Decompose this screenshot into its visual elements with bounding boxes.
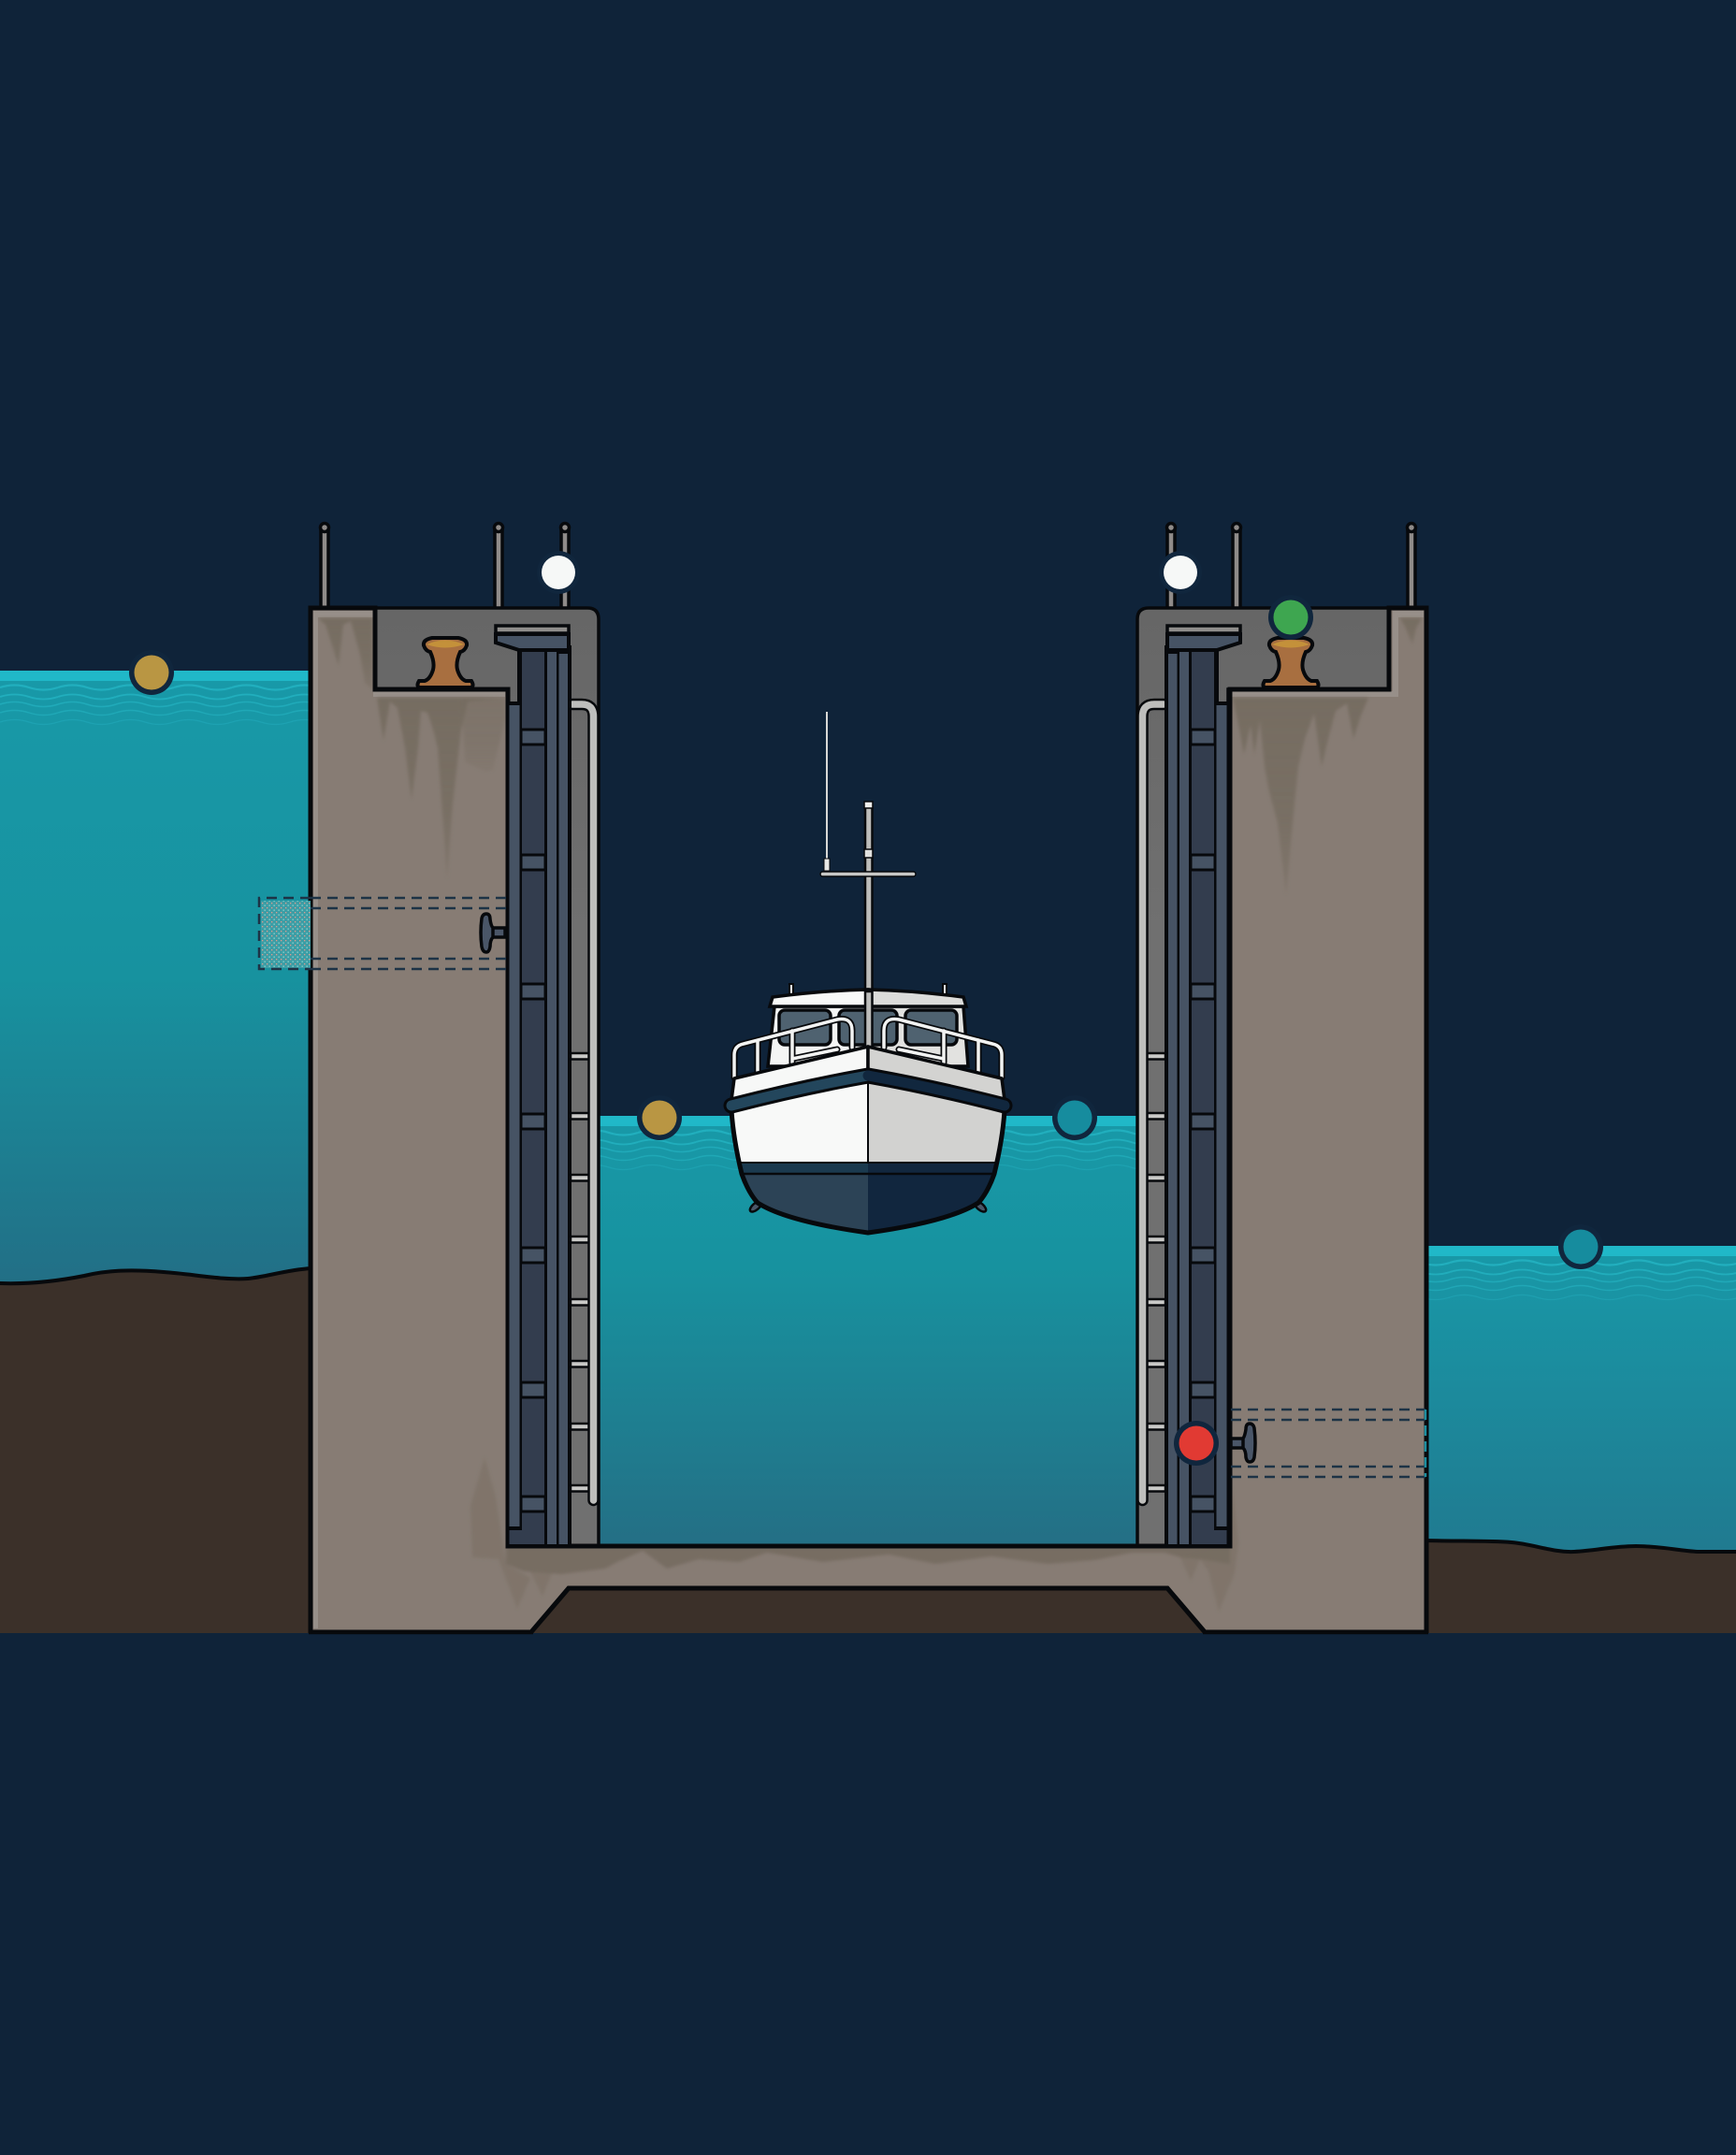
wall highlights — [313, 611, 1424, 1628]
mast and crossbar — [820, 802, 916, 1046]
stains: chamber floor — [470, 1457, 1238, 1612]
back panel: left — [375, 608, 599, 1546]
indicator: white, right gate — [1159, 551, 1202, 594]
indicator: green, right bollard — [1268, 595, 1313, 640]
lock gate: left — [496, 626, 571, 1548]
bollard: right — [1263, 638, 1319, 687]
water: lock chamber — [595, 1116, 1141, 1546]
indicator: white, left gate — [537, 551, 580, 594]
culvert: right wall — [1231, 1410, 1425, 1477]
structure outline — [311, 608, 1426, 1632]
handrail pipe: right — [1143, 704, 1164, 1500]
indicator: teal, downstream water — [1558, 1224, 1603, 1269]
indicator: red, right valve — [1174, 1421, 1219, 1466]
bottom edge of walls — [309, 1630, 1428, 1634]
water: upstream left — [0, 671, 311, 1288]
foredeck — [731, 1047, 1005, 1100]
handrail pipe: left — [572, 704, 593, 1500]
boat — [731, 712, 1005, 1233]
ground: right bank — [1426, 1540, 1736, 1646]
valve: right — [1231, 1424, 1255, 1462]
bilge fins — [748, 1199, 988, 1214]
indicator: teal, chamber — [1052, 1095, 1097, 1140]
stains: left wall — [318, 618, 505, 879]
radio antenna — [824, 712, 830, 871]
valve: left — [481, 914, 505, 952]
culvert: left wall with intake — [259, 898, 506, 969]
cabin — [768, 984, 968, 1066]
bow railing — [734, 1020, 1002, 1078]
ladder: left — [571, 1053, 591, 1491]
rub rail — [731, 1076, 1005, 1106]
ladder: right — [1145, 1053, 1165, 1491]
back panel: right — [1137, 608, 1389, 1546]
railing posts: right wall — [1167, 524, 1416, 627]
indicator: gold, upstream water — [129, 650, 174, 695]
concrete lock structure — [311, 608, 1426, 1632]
ground under chamber floor — [519, 1588, 1217, 1646]
stains: right wall — [1233, 618, 1422, 895]
lock gate: right — [1165, 626, 1240, 1548]
navy below ground line — [0, 1633, 1736, 2155]
water: downstream right — [1426, 1246, 1736, 1555]
bollard: left — [417, 638, 473, 687]
railing posts: left wall — [320, 524, 569, 627]
ground: left bank — [0, 1268, 311, 1646]
hull — [731, 1082, 1005, 1233]
indicator: gold, chamber — [637, 1095, 682, 1140]
